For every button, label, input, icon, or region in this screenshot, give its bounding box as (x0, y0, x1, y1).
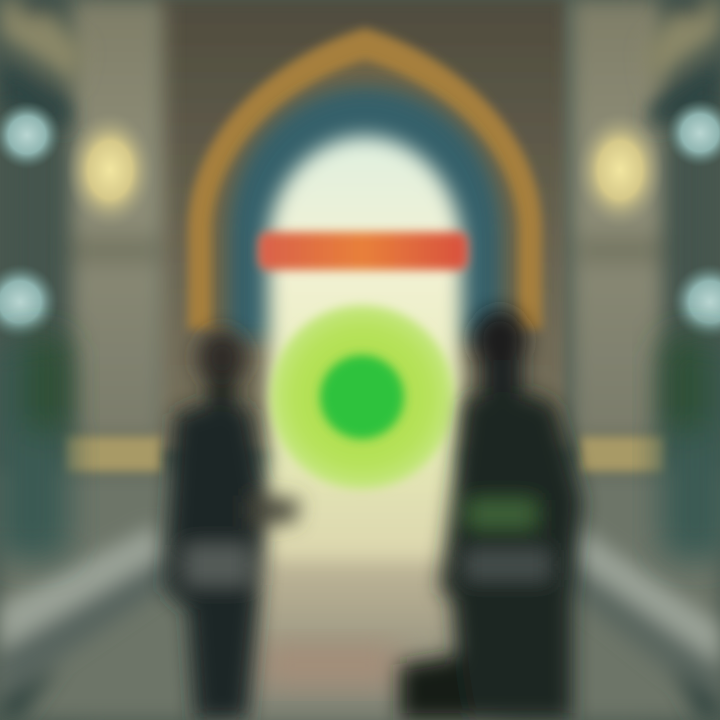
left wall lamp (66, 112, 154, 228)
target: light green halo (270, 305, 454, 489)
arch: bright opening (268, 136, 462, 560)
gold plinths (64, 436, 666, 472)
left statue (0, 335, 70, 560)
teal glow lights (0, 99, 720, 340)
arch: orange outer band (188, 28, 542, 330)
right statue (660, 335, 720, 560)
green target (270, 305, 454, 489)
top corner beams (0, 0, 720, 130)
archway (188, 28, 542, 560)
side columns (70, 0, 663, 440)
arch: stone between bands (212, 60, 518, 330)
right floor ledge (560, 525, 720, 720)
floor (0, 470, 720, 720)
right wall lamp (576, 112, 664, 228)
target: green centre (320, 355, 404, 439)
left floor ledge (0, 525, 175, 720)
arch: teal inner band (228, 86, 502, 340)
red banner (258, 232, 468, 270)
right figure (400, 310, 582, 720)
left figure (165, 330, 300, 720)
